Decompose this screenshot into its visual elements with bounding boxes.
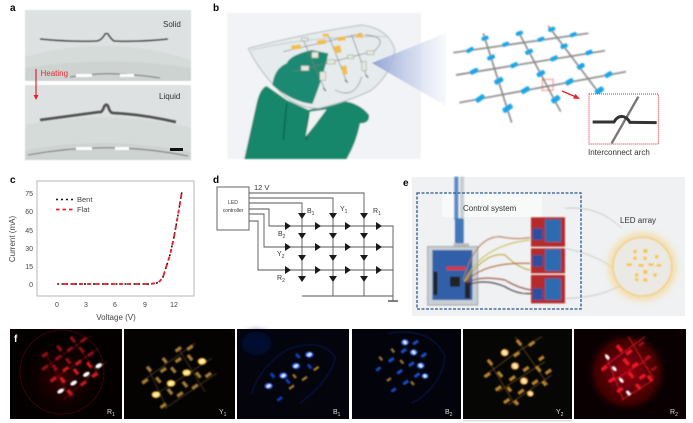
control system dashed frame	[417, 193, 581, 309]
white label strip	[442, 193, 542, 217]
label 12 V: 12 V	[254, 183, 269, 192]
x axis labels	[55, 302, 178, 309]
jumper wires	[463, 237, 532, 294]
channel labels: 2	[282, 278, 285, 284]
channel labels: 2	[283, 234, 286, 240]
photo: solid state	[25, 10, 191, 81]
channel labels: B	[278, 231, 283, 238]
photo R1: 1	[112, 412, 115, 418]
photo B2: 2	[450, 412, 453, 418]
plot frame	[37, 181, 194, 296]
photo Y2: 2	[561, 412, 564, 418]
panel label c: c	[10, 175, 16, 186]
LED controller box: LED	[228, 200, 238, 206]
blue LEDs	[466, 26, 613, 114]
diodes	[285, 213, 382, 282]
wiring	[249, 193, 398, 301]
thin array wires	[565, 208, 632, 298]
photo B1: B	[333, 409, 338, 416]
y axis ticks and labels: 60	[25, 209, 33, 216]
photo R1: R	[107, 409, 112, 416]
photo: liquid state	[25, 85, 191, 160]
photo Y2	[463, 329, 572, 422]
microcontroller	[428, 247, 478, 305]
photo R2: R	[670, 409, 675, 416]
flat curve	[57, 191, 182, 284]
photo R2: 2	[675, 412, 678, 418]
panel b: photo and schematic	[213, 3, 658, 159]
legend: Flat	[77, 205, 90, 214]
y axis ticks and labels: 30	[25, 246, 33, 253]
photo contents in zoom coordinates	[428, 177, 673, 305]
label Interconnect arch: Interconnect arch	[588, 148, 650, 157]
scale bar	[170, 148, 183, 151]
channel labels: B	[307, 208, 312, 215]
panel a: solid and liquid photos	[10, 3, 191, 160]
LED array dish	[612, 236, 673, 297]
channel labels: 2	[282, 254, 285, 260]
panel f: LED photos	[10, 329, 686, 422]
channel labels: Y	[340, 206, 345, 213]
photo background	[412, 177, 685, 316]
panel c: IV chart	[8, 175, 194, 322]
bent curve	[57, 191, 182, 284]
y axis ticks and labels: 0	[29, 282, 33, 289]
channel labels: 1	[378, 211, 381, 217]
x axis labels: 9	[143, 302, 147, 309]
USB cable	[454, 177, 469, 253]
red zoom arrow	[562, 91, 580, 99]
legend	[56, 195, 93, 214]
channel labels: R	[277, 275, 282, 282]
channel labels: 1	[312, 211, 315, 217]
schematic: LED grid	[453, 26, 626, 123]
photo R2	[574, 329, 686, 419]
x axis labels: 0	[55, 302, 59, 309]
label Liquid: Liquid	[159, 92, 180, 101]
x axis labels: 6	[113, 302, 117, 309]
panel label e: e	[403, 178, 409, 189]
heating arrow	[34, 69, 38, 100]
inset: interconnect arch	[589, 94, 658, 144]
label Solid: Solid	[163, 20, 181, 29]
x axis title: Voltage (V)	[96, 313, 136, 322]
y axis title: Current (mA)	[8, 216, 17, 262]
y axis ticks and labels: 45	[25, 228, 33, 235]
channel labels: R	[373, 208, 378, 215]
panel d: circuit diagram	[213, 175, 398, 301]
photo R1	[10, 329, 122, 420]
panel label f: f	[14, 334, 18, 345]
blue projection cone	[372, 33, 446, 106]
channel labels	[277, 206, 381, 284]
panel label b: b	[213, 3, 219, 14]
photo Y1: Y	[219, 409, 224, 416]
panel label d: d	[213, 175, 219, 186]
x axis labels: 3	[84, 302, 88, 309]
panel e: control system photo	[403, 177, 685, 316]
channel labels: 1	[345, 209, 348, 215]
photo B2: B	[445, 409, 450, 416]
panel label a: a	[10, 3, 16, 14]
photo B1: 1	[338, 412, 341, 418]
photo Y1	[124, 329, 235, 419]
photo Y2: Y	[556, 409, 561, 416]
y axis ticks and labels: 15	[25, 264, 33, 271]
photo B2	[352, 329, 461, 419]
photo: gloved hand holding device	[227, 13, 421, 159]
label Heating: Heating	[40, 69, 68, 78]
photo B1	[237, 329, 349, 419]
label LED array: LED array	[620, 216, 656, 225]
legend: Bent	[77, 195, 93, 204]
channel labels: Y	[277, 251, 282, 258]
photo Y1: 1	[224, 412, 227, 418]
LED controller box: controller	[223, 208, 244, 214]
label Control system: Control system	[463, 204, 517, 213]
y axis ticks and labels	[25, 191, 33, 289]
y axis ticks and labels: 75	[25, 191, 33, 198]
LED controller box	[217, 187, 249, 230]
relay modules	[531, 217, 565, 303]
x axis labels: 12	[170, 302, 178, 309]
